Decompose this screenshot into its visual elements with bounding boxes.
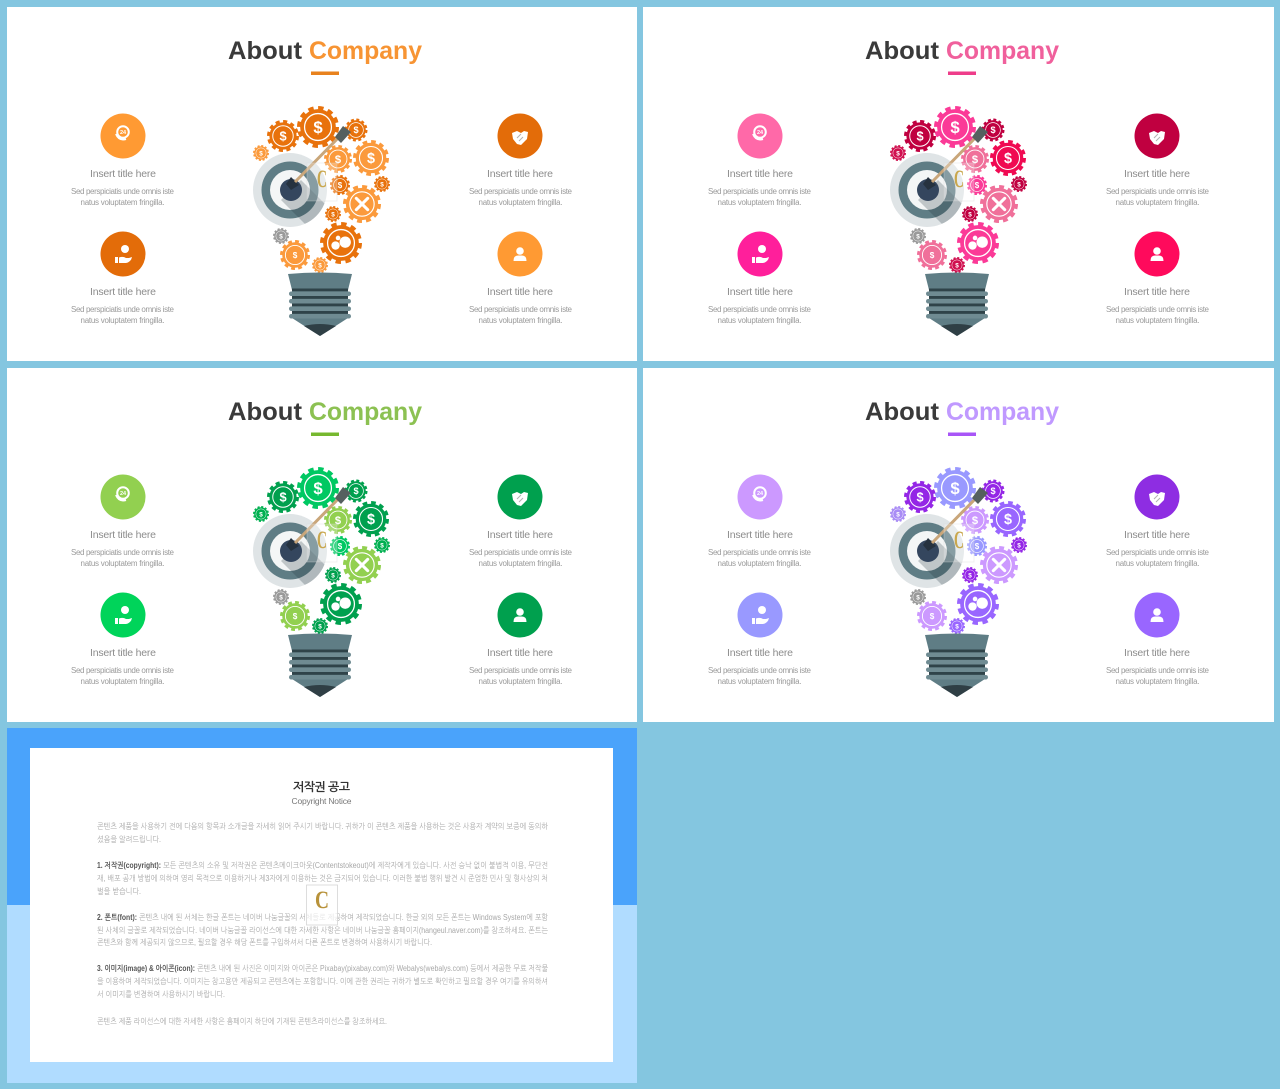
notice item 2: 2. 폰트(font): bbox=[97, 913, 137, 922]
panel: orange company slide bbox=[7, 7, 637, 361]
gear cluster bbox=[891, 108, 1026, 272]
notice item 2 bbox=[97, 913, 548, 947]
gear cluster: $ bbox=[335, 515, 342, 527]
text block: bottom right: natus voluptatem fringilla. bbox=[1116, 316, 1200, 325]
text block: top right: natus voluptatem fringilla. bbox=[1116, 198, 1200, 207]
text block: top right: natus voluptatem fringilla. bbox=[1116, 559, 1200, 568]
bulb illustration bbox=[253, 108, 389, 336]
text block: top left: Insert title here bbox=[90, 529, 156, 541]
gear cluster bbox=[891, 469, 1026, 633]
title bbox=[865, 37, 1059, 65]
text block: bottom left: Sed perspiciatis unde omnis iste bbox=[71, 666, 175, 675]
gear cluster: $ bbox=[916, 594, 920, 601]
icon: hand with coin bbox=[100, 232, 146, 276]
watermark bbox=[944, 524, 974, 562]
gear cluster: $ bbox=[916, 128, 924, 143]
gear cluster: $ bbox=[331, 572, 335, 579]
notice item 3: 3. 이미지(image) & 아이콘(icon): bbox=[97, 964, 195, 973]
gear cluster: $ bbox=[353, 486, 359, 496]
panel: green company slide bbox=[7, 368, 637, 722]
icon: handshake bbox=[498, 114, 542, 158]
gear cluster: $ bbox=[955, 262, 959, 269]
gear cluster: $ bbox=[380, 181, 384, 188]
gear cluster: $ bbox=[968, 572, 972, 579]
gear cluster: $ bbox=[380, 542, 384, 549]
gear cluster: $ bbox=[930, 251, 935, 260]
text block: top left bbox=[71, 529, 175, 568]
icon: person bbox=[498, 232, 542, 276]
text block: top right: Sed perspiciatis unde omnis iste bbox=[469, 187, 573, 196]
watermark bbox=[306, 885, 338, 925]
text block: top right bbox=[469, 529, 573, 568]
text block: bottom left: Insert title here bbox=[90, 286, 156, 298]
title: Company bbox=[946, 398, 1059, 426]
title: About bbox=[865, 398, 940, 426]
text block: bottom right: Sed perspiciatis unde omnis iste bbox=[469, 666, 573, 675]
gear cluster: $ bbox=[896, 511, 900, 518]
text block: top right bbox=[1106, 168, 1210, 207]
text block: top left: natus voluptatem fringilla. bbox=[718, 198, 802, 207]
bulb illustration bbox=[253, 469, 389, 697]
notice closing line: 콘텐츠 제품 라이선스에 대한 자세한 사항은 홈페이지 하단에 기재된 콘텐츠라이선스를 참조하세요. bbox=[97, 1017, 387, 1026]
icon: handshake bbox=[1134, 114, 1180, 158]
notice intro: 콘텐츠 제품을 사용하기 전에 다음의 항목과 소개글을 자세히 읽어 주시기 바랍니다. 귀하가 이 콘텐츠 제품을 사용하는 것은 사용자 계약의 보증에 동의하 bbox=[97, 822, 548, 831]
title underline bbox=[948, 72, 976, 75]
text block: bottom left: Insert title here bbox=[90, 647, 156, 659]
text block: bottom right bbox=[1106, 286, 1210, 325]
notice item 2: 콘텐츠 내에 된 서체는 한글 폰트는 네이버 나눔글꼴의 서체들로 제공하여 제작되었습니다. 한글 외의 모든 폰트는 Windows System에 포함 bbox=[139, 913, 548, 922]
text block: top right: Insert title here bbox=[1124, 529, 1190, 541]
notice item 1: 모든 콘텐츠의 소유 및 저작권은 콘텐츠메이크아웃(Contentstokeout)에 제작자에게 있습니다. 사전 승낙 없이 불법적 이용, 무단전 bbox=[163, 861, 548, 870]
text block: top left bbox=[71, 168, 175, 207]
target with arrow bbox=[890, 487, 988, 601]
gear cluster: $ bbox=[293, 612, 298, 621]
title: About bbox=[228, 37, 303, 65]
watermark bbox=[307, 163, 337, 201]
target with arrow bbox=[890, 126, 988, 240]
gear cluster: $ bbox=[990, 486, 996, 496]
gear cluster: $ bbox=[1017, 542, 1021, 549]
text block: bottom right: Insert title here bbox=[487, 286, 553, 298]
text block: bottom right bbox=[1106, 647, 1210, 686]
text block: bottom right bbox=[469, 647, 573, 686]
gear cluster: $ bbox=[972, 154, 979, 166]
text block: bottom right bbox=[469, 286, 573, 325]
text block: bottom left: Insert title here bbox=[727, 647, 793, 659]
text block: top right: Insert title here bbox=[487, 168, 553, 180]
gear cluster: $ bbox=[975, 542, 980, 551]
gear cluster: $ bbox=[990, 125, 996, 135]
notice item 1: 1. 저작권(copyright): bbox=[97, 861, 161, 870]
gear cluster: $ bbox=[916, 233, 920, 240]
text block: bottom left: natus voluptatem fringilla. bbox=[80, 316, 164, 325]
gear cluster: $ bbox=[353, 125, 359, 135]
notice item 3: 서 이미지를 변경하여 사용하시기 바랍니다. bbox=[97, 990, 225, 999]
notice intro: 셨음을 알려드립니다. bbox=[97, 835, 161, 844]
gear cluster: $ bbox=[318, 262, 322, 269]
bulb socket bbox=[925, 634, 989, 697]
text block: bottom left bbox=[71, 647, 175, 686]
gear cluster: $ bbox=[950, 479, 960, 498]
gear cluster: $ bbox=[1017, 181, 1021, 188]
text block: bottom right: natus voluptatem fringilla. bbox=[478, 677, 562, 686]
icon: 24 hour support bbox=[738, 114, 782, 158]
text block: bottom left: Insert title here bbox=[727, 286, 793, 298]
gear cluster: $ bbox=[930, 612, 935, 621]
gear cluster: $ bbox=[955, 623, 959, 630]
gear cluster bbox=[254, 108, 389, 272]
panel: purple company slide bbox=[643, 368, 1274, 722]
icon: handshake bbox=[1134, 474, 1180, 520]
bulb illustration bbox=[890, 469, 1026, 697]
text block: top left: natus voluptatem fringilla. bbox=[80, 198, 164, 207]
icon: hand with coin bbox=[738, 232, 782, 276]
gear cluster: $ bbox=[338, 181, 343, 190]
text block: top right: Sed perspiciatis unde omnis iste bbox=[1106, 548, 1210, 557]
gear cluster: $ bbox=[972, 515, 979, 527]
text block: top right: Sed perspiciatis unde omnis iste bbox=[1106, 187, 1210, 196]
gear cluster: $ bbox=[975, 181, 980, 190]
gear cluster bbox=[254, 469, 389, 633]
text block: bottom left: Sed perspiciatis unde omnis iste bbox=[71, 305, 175, 314]
gear cluster: $ bbox=[331, 211, 335, 218]
text block: top right: Insert title here bbox=[1124, 168, 1190, 180]
notice heading bbox=[292, 780, 352, 806]
text block: top right bbox=[469, 168, 573, 207]
title: About bbox=[228, 398, 303, 426]
title bbox=[228, 398, 422, 426]
text block: bottom right: Sed perspiciatis unde omnis iste bbox=[1106, 666, 1210, 675]
panel: pink company slide bbox=[643, 7, 1274, 361]
title underline bbox=[311, 72, 339, 75]
gear cluster: $ bbox=[259, 150, 263, 157]
title: Company bbox=[309, 398, 422, 426]
text block: bottom left bbox=[708, 286, 812, 325]
title: Company bbox=[309, 37, 422, 65]
notice item 3 bbox=[97, 964, 548, 999]
notice item 2: 된 사체의 글꼴로 제작되었습니다. 네이버 나눔글꼴 라이선스에 대한 자세한 사항은 네이버 나눔글꼴 홈페이지(hangeul.naver.com)를 참조하세요. 폰트는 bbox=[97, 926, 548, 935]
gear cluster: $ bbox=[279, 233, 283, 240]
bulb illustration bbox=[890, 108, 1026, 336]
gear cluster: $ bbox=[279, 594, 283, 601]
title bbox=[228, 37, 422, 65]
title: About bbox=[865, 37, 940, 65]
text block: bottom right: Sed perspiciatis unde omnis iste bbox=[469, 305, 573, 314]
gear cluster: $ bbox=[367, 151, 375, 167]
bulb socket bbox=[288, 634, 352, 697]
text block: top right: natus voluptatem fringilla. bbox=[478, 198, 562, 207]
text block: bottom left: natus voluptatem fringilla. bbox=[718, 677, 802, 686]
icon: person bbox=[1134, 232, 1180, 276]
gear cluster: $ bbox=[916, 489, 924, 504]
notice intro bbox=[97, 822, 548, 844]
text block: bottom left: Sed perspiciatis unde omnis iste bbox=[708, 305, 812, 314]
gear cluster: $ bbox=[279, 128, 287, 143]
text block: top left: Sed perspiciatis unde omnis iste bbox=[708, 548, 812, 557]
icon: 24 hour support bbox=[100, 114, 146, 158]
text block: top left: Sed perspiciatis unde omnis iste bbox=[71, 187, 175, 196]
icon: hand with coin bbox=[100, 592, 146, 638]
title bbox=[865, 398, 1059, 426]
text block: top left: Sed perspiciatis unde omnis iste bbox=[71, 548, 175, 557]
text block: top left: Sed perspiciatis unde omnis iste bbox=[708, 187, 812, 196]
title underline bbox=[948, 432, 976, 436]
gear cluster: $ bbox=[313, 479, 323, 498]
bulb socket bbox=[288, 272, 352, 336]
text block: top left: Insert title here bbox=[727, 168, 793, 180]
gear cluster: $ bbox=[896, 150, 900, 157]
bulb socket bbox=[925, 272, 989, 336]
notice item 2: 콘텐츠와 함께 제공되지 않으므로, 필요할 경우 해당 폰트를 구입하셔서 다른 폰트로 변경하여 사용하시기 바랍니다. bbox=[97, 938, 432, 947]
text block: bottom right: Insert title here bbox=[1124, 286, 1190, 298]
icon: handshake bbox=[498, 474, 542, 520]
gear cluster: $ bbox=[313, 118, 323, 137]
notice item 1: 벌을 받습니다. bbox=[97, 887, 141, 896]
text block: top right: Sed perspiciatis unde omnis iste bbox=[469, 548, 573, 557]
notice item 3: 콘텐츠 내에 된 사진은 이미지와 아이콘은 Pixabay(pixabay.com)와 Webalys(webalys.com) 등에서 제공한 무료 저작물 bbox=[197, 964, 548, 973]
gear cluster: $ bbox=[1004, 512, 1012, 528]
text block: bottom left bbox=[708, 647, 812, 686]
notice item 1: 재, 배포 공개 방법에 의하여 영리 목적으로 이용하거나 제3자에게 이용하는 것은 금지되어 있습니다. 이러한 불법 행위 발견 시 준엄한 민사 및 형사상의 처 bbox=[97, 874, 548, 883]
icon: 24 hour support bbox=[100, 474, 146, 520]
text block: bottom right: Sed perspiciatis unde omnis iste bbox=[1106, 305, 1210, 314]
text block: top left bbox=[708, 168, 812, 207]
text block: top right: natus voluptatem fringilla. bbox=[478, 559, 562, 568]
gear cluster: $ bbox=[293, 251, 298, 260]
icon: hand with coin bbox=[738, 592, 782, 638]
notice item 1 bbox=[97, 861, 548, 896]
target with arrow bbox=[253, 487, 351, 601]
target with arrow bbox=[253, 126, 351, 240]
icon: person bbox=[498, 592, 542, 638]
icon: 24 hour support bbox=[738, 474, 782, 520]
text block: bottom right: Insert title here bbox=[1124, 647, 1190, 659]
gear cluster: $ bbox=[367, 512, 375, 528]
gear cluster: $ bbox=[318, 623, 322, 630]
panel: copyright notice bbox=[7, 728, 637, 1083]
icon: person bbox=[1134, 592, 1180, 638]
text block: bottom left bbox=[71, 286, 175, 325]
gear cluster: $ bbox=[335, 154, 342, 166]
text block: top left bbox=[708, 529, 812, 568]
title: Company bbox=[946, 37, 1059, 65]
notice item 3: 을 이용하여 제작되었습니다. 이미지는 참고용만 제공되고 콘텐츠에는 포함합니다. 이에 관한 권리는 귀하가 별도로 확인하고 필요할 경우 여기를 유의하셔 bbox=[97, 977, 548, 986]
text block: top right bbox=[1106, 529, 1210, 568]
gear cluster: $ bbox=[1004, 151, 1012, 167]
gear cluster: $ bbox=[259, 511, 263, 518]
text block: bottom left: Sed perspiciatis unde omnis iste bbox=[708, 666, 812, 675]
text block: top left: natus voluptatem fringilla. bbox=[718, 559, 802, 568]
gear cluster: $ bbox=[950, 118, 960, 137]
text block: bottom right: natus voluptatem fringilla. bbox=[478, 316, 562, 325]
text block: top right: Insert title here bbox=[487, 529, 553, 541]
gear cluster: $ bbox=[338, 542, 343, 551]
text block: bottom right: Insert title here bbox=[487, 647, 553, 659]
text block: top left: Insert title here bbox=[727, 529, 793, 541]
watermark: C bbox=[315, 887, 329, 914]
watermark bbox=[944, 163, 974, 201]
watermark bbox=[307, 524, 337, 562]
text block: bottom left: natus voluptatem fringilla. bbox=[718, 316, 802, 325]
text block: bottom left: natus voluptatem fringilla. bbox=[80, 677, 164, 686]
notice heading: Copyright Notice bbox=[292, 796, 352, 806]
gear cluster: $ bbox=[968, 211, 972, 218]
text block: bottom right: natus voluptatem fringilla. bbox=[1116, 677, 1200, 686]
title underline bbox=[311, 432, 339, 436]
text block: top left: Insert title here bbox=[90, 168, 156, 180]
notice heading: 저작권 공고 bbox=[293, 780, 351, 794]
text block: top left: natus voluptatem fringilla. bbox=[80, 559, 164, 568]
gear cluster: $ bbox=[279, 489, 287, 504]
